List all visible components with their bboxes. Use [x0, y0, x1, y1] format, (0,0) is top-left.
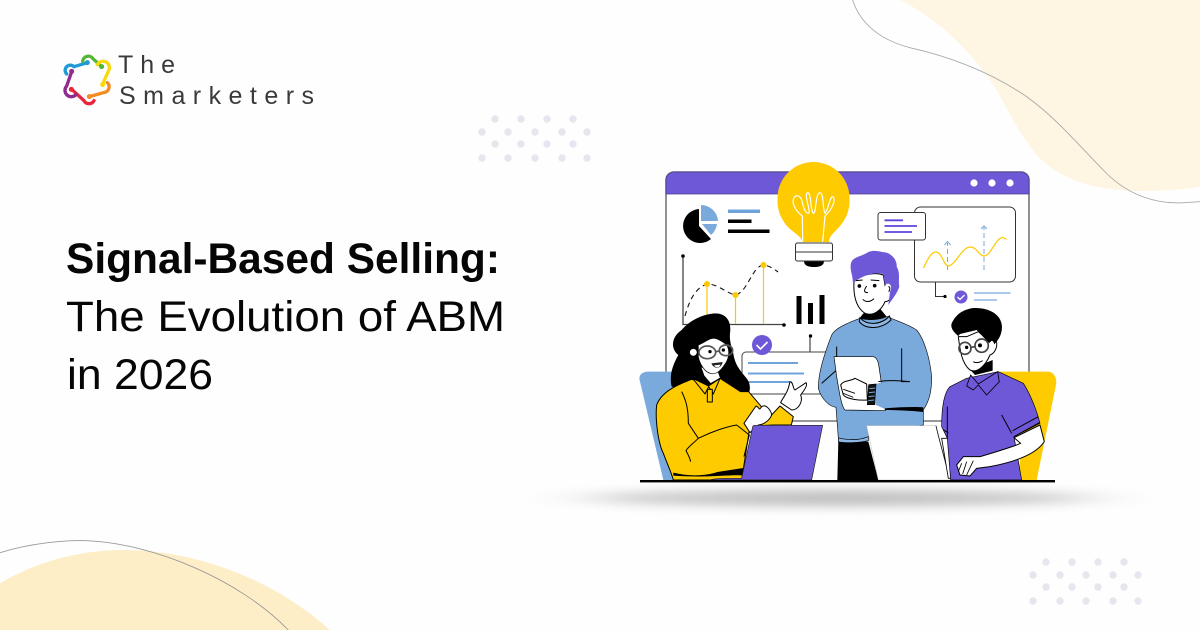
dot grid: top centre [478, 115, 591, 162]
note card [878, 212, 926, 240]
curve: bottom left thin line [0, 541, 288, 630]
tablet [834, 357, 885, 411]
bar chart [796, 295, 824, 324]
hair [951, 308, 1002, 344]
hair [671, 313, 750, 400]
purple polo [942, 372, 1040, 480]
blob: bottom left cream shape [0, 550, 330, 630]
dot grid: bottom right [1029, 558, 1142, 605]
laptop: purple [710, 425, 823, 480]
left forearm [942, 438, 952, 478]
blue sweater [818, 316, 932, 443]
logo wordmark: Smarketers: Smarketers [119, 82, 314, 110]
face [958, 332, 997, 371]
text card behind woman [742, 334, 832, 394]
title line 1: Signal-Based Selling: [66, 235, 500, 283]
chart card: yellow wave [914, 207, 1016, 282]
face [698, 338, 729, 374]
window body [666, 172, 1029, 421]
chair: yellow [997, 372, 1056, 480]
window control dots [970, 179, 1014, 187]
title line 2: The Evolution of ABM [66, 293, 505, 341]
collar [693, 378, 720, 394]
logo: The Smarketers [65, 51, 314, 110]
title line 3: in 2026 [67, 351, 213, 399]
sleeve creases [943, 407, 1039, 438]
window header bar [666, 172, 1029, 194]
forearm [875, 348, 923, 409]
line chart [681, 254, 786, 327]
icon: pie chart [683, 205, 718, 243]
yellow sweater [656, 378, 793, 480]
connector with status check [936, 282, 1010, 304]
neck [970, 360, 993, 375]
polo collar [967, 372, 999, 395]
hand raised [781, 382, 807, 410]
glasses [699, 345, 733, 359]
laptop: white [867, 426, 978, 480]
person: man in blue sweater [818, 251, 932, 480]
icon: lightbulb [777, 162, 850, 267]
legend lines [728, 210, 770, 233]
person: woman in yellow sweater [656, 313, 823, 480]
chair: blue [639, 372, 673, 480]
glasses [959, 339, 988, 354]
curve: top right thin line [853, 0, 1200, 203]
hand on tablet [841, 378, 867, 400]
person: man in purple polo [942, 308, 1044, 480]
head [851, 251, 899, 320]
sweater creases [682, 392, 749, 462]
illustration: team around dashboard [505, 162, 1175, 510]
ear [689, 348, 697, 356]
logo wordmark: The: The [118, 51, 175, 79]
neck [701, 367, 721, 385]
browser window [666, 172, 1029, 421]
hand left [744, 406, 772, 433]
cuff [867, 384, 876, 405]
arm and hand [957, 425, 1044, 476]
blob: top right cream shape [900, 0, 1200, 191]
trousers [837, 442, 878, 480]
title [66, 235, 505, 399]
ground shadow [505, 486, 1175, 510]
icon: coloured chain ring [65, 56, 109, 104]
table line [640, 480, 1055, 482]
